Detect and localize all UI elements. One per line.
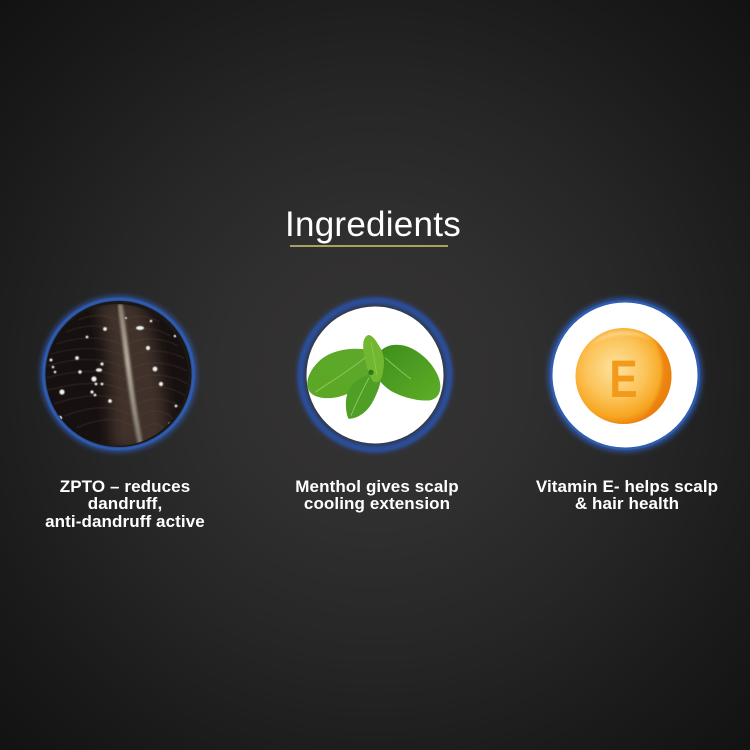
caption: ZPTO — [45, 476, 205, 530]
caption: menthol: Menthol gives scalp — [295, 476, 459, 496]
icon: mint leaves — [300, 300, 450, 450]
capsule letter E: E — [609, 351, 638, 409]
title: Ingredients — [285, 205, 461, 244]
caption: vitamin E — [536, 476, 718, 513]
caption: ZPTO: dandruff, — [88, 494, 162, 513]
icon: dandruff scalp — [40, 295, 200, 455]
caption: ZPTO: anti-dandruff active — [45, 512, 205, 530]
caption: vitamin E: Vitamin E- helps scalp — [536, 476, 718, 496]
caption: menthol: cooling extension — [304, 494, 450, 513]
icon: vitamin E capsule — [551, 301, 699, 449]
caption: ZPTO: ZPTO – reduces — [60, 476, 190, 496]
ingredient icons — [36, 292, 706, 456]
title underline — [290, 245, 448, 247]
caption: vitamin E: & hair health — [575, 494, 679, 513]
caption: menthol — [295, 476, 459, 513]
